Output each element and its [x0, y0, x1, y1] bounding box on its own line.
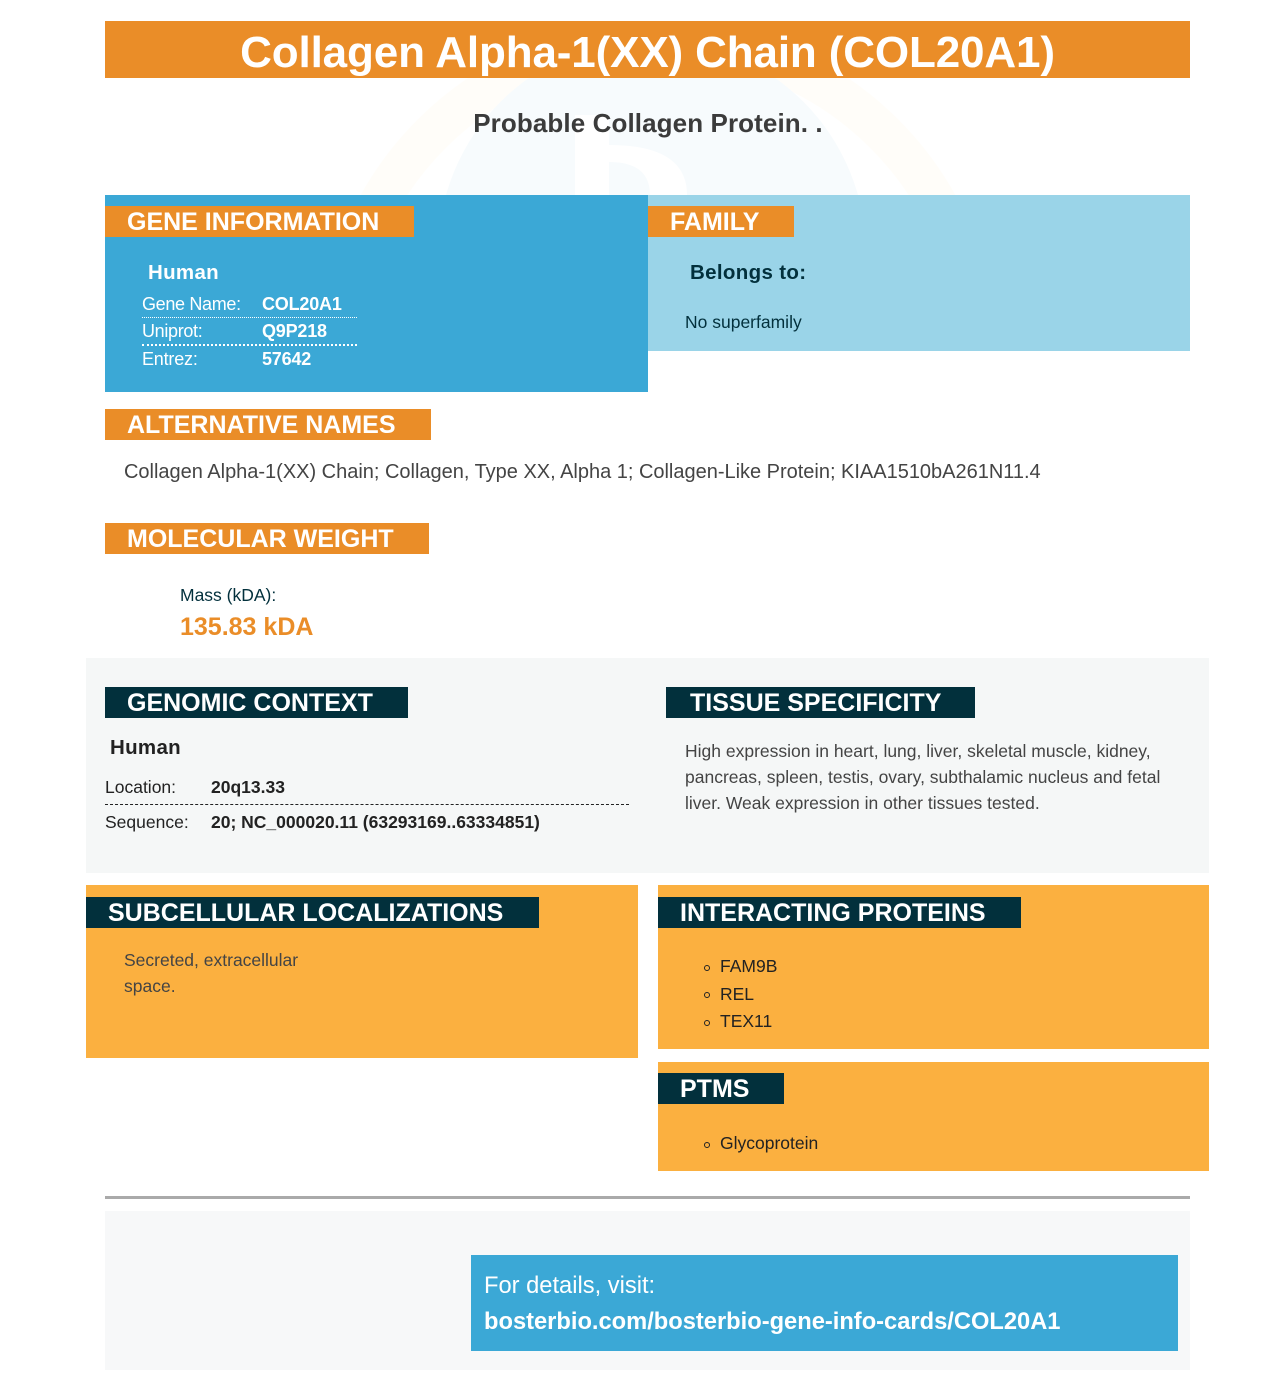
tissue specificity text: liver. Weak expression in other tissues tested. — [685, 793, 1040, 813]
localization text — [124, 950, 298, 996]
mass label: Mass (kDA): — [180, 585, 276, 605]
tissue specificity text — [685, 741, 1160, 813]
protein list: TEX11 — [720, 1011, 772, 1031]
visit label: For details, visit: — [484, 1273, 655, 1299]
alternative names text: Collagen Alpha-1(XX) Chain; Collagen, Type XX, Alpha 1; Collagen-Like Protein; KIAA1510bA261N11.4 — [124, 461, 1041, 483]
panel: ptms — [658, 1062, 1209, 1171]
belongs to label: Belongs to: — [690, 261, 806, 284]
mass value: 135.83 kDA — [180, 613, 313, 641]
callout: details link — [471, 1255, 1178, 1351]
heading: family — [648, 206, 794, 237]
ptm list: Glycoprotein — [720, 1133, 818, 1153]
species label: Human — [110, 736, 181, 759]
panel: subcellular localizations — [86, 885, 638, 1058]
heading: ptms: PTMS — [680, 1075, 749, 1103]
panel: gene information — [105, 195, 648, 392]
watermark logo — [340, 78, 980, 195]
panel: genomic context and tissue specificity — [86, 658, 1209, 873]
sequence row: 20; NC_000020.11 (63293169..63334851) — [211, 812, 540, 832]
url: bosterbio.com/bosterbio-gene-info-cards/COL20A1 — [484, 1309, 1060, 1335]
localization text: Secreted, extracellular — [124, 950, 298, 970]
protein list — [704, 956, 777, 1031]
protein list: REL — [720, 984, 754, 1004]
uniprot row: Q9P218 — [262, 321, 327, 341]
entrez row: Entrez: — [142, 349, 198, 369]
heading: gene information: GENE INFORMATION — [127, 208, 379, 236]
tissue specificity text: High expression in heart, lung, liver, skeletal muscle, kidney, — [685, 741, 1151, 761]
title banner — [105, 21, 1190, 78]
heading: family: FAMILY — [670, 208, 759, 236]
gene name row: COL20A1 — [262, 294, 342, 314]
location row: 20q13.33 — [211, 777, 285, 797]
gene name row — [142, 291, 357, 318]
heading: ptms — [658, 1073, 784, 1104]
heading: genomic context: GENOMIC CONTEXT — [127, 689, 373, 717]
entrez row — [142, 349, 311, 369]
panel: interacting proteins — [658, 885, 1209, 1049]
localization text: space. — [124, 976, 176, 996]
family text: No superfamily — [685, 312, 802, 332]
heading: interacting proteins: INTERACTING PROTEINS — [680, 899, 986, 927]
protein list: FAM9B — [720, 956, 777, 976]
subtitle: Probable Collagen Protein. . — [473, 108, 823, 138]
location row — [105, 774, 629, 805]
gene name row: Gene Name: — [142, 294, 241, 314]
entrez row: 57642 — [262, 349, 311, 369]
sequence row: Sequence: — [105, 812, 189, 832]
panel: family — [648, 195, 1190, 351]
location row: Location: — [105, 777, 176, 797]
heading: alternative names: ALTERNATIVE NAMES — [127, 411, 396, 439]
divider — [105, 1196, 1190, 1199]
uniprot row — [142, 318, 357, 346]
panel: footer — [105, 1211, 1190, 1370]
title banner: Collagen Alpha-1(XX) Chain (COL20A1) — [240, 28, 1055, 77]
species label: Human — [148, 261, 219, 284]
heading: subcellular localizations: SUBCELLULAR LOCALIZATIONS — [108, 899, 503, 927]
heading: molecular weight: MOLECULAR WEIGHT — [127, 525, 394, 553]
tissue specificity text: pancreas, spleen, testis, ovary, subthalamic nucleus and fetal — [685, 767, 1160, 787]
uniprot row: Uniprot: — [142, 321, 202, 341]
heading: tissue specificity: TISSUE SPECIFICITY — [690, 689, 941, 717]
